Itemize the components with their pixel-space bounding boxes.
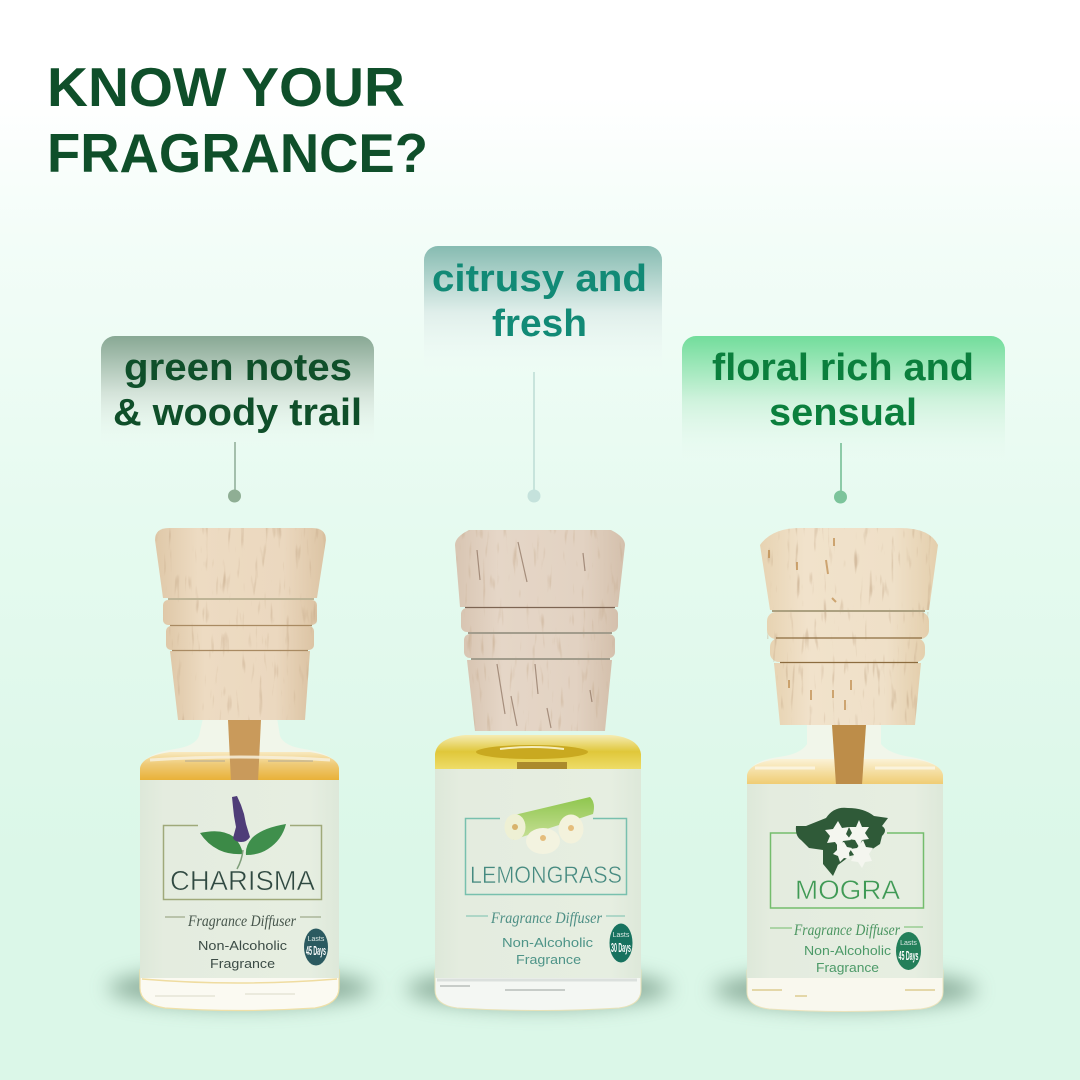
icon: lemongrass stalk <box>504 797 594 854</box>
callout: green notes <box>101 336 374 502</box>
title: KNOW YOUR <box>47 56 405 118</box>
callout: citrusy and fresh: citrusy and <box>432 258 647 300</box>
label <box>140 780 339 978</box>
badge <box>610 924 632 962</box>
badge: Lasts <box>900 940 917 947</box>
badge <box>304 928 328 966</box>
neck and liquid <box>747 724 943 785</box>
product note: Non-Alcoholic <box>804 943 892 958</box>
callout: floral rich and sensual <box>682 336 1005 504</box>
title <box>47 56 428 184</box>
product: Charisma bottle: 45 Days <box>306 943 326 958</box>
product note: Fragrance <box>516 952 581 967</box>
callout: green notes: green notes <box>124 347 352 389</box>
callout: floral rich and sensual: sensual <box>769 392 917 434</box>
callout: green notes: & woody trail <box>113 392 362 434</box>
product note: Fragrance <box>210 956 275 971</box>
label <box>747 784 943 978</box>
product: Charisma bottle <box>140 528 339 1010</box>
callout: floral rich and sensual: floral rich and <box>712 347 974 389</box>
product: Lemongrass bottle: 30 Days <box>611 940 631 955</box>
product: Lemongrass bottle <box>435 530 641 1010</box>
product note <box>804 943 892 975</box>
glass base <box>747 970 943 1012</box>
frame <box>466 818 626 894</box>
badge: Lasts <box>613 932 630 939</box>
product note <box>198 938 288 971</box>
subtitle: Fragrance Diffuser <box>187 913 297 930</box>
ground shadow <box>108 969 977 1009</box>
neck and liquid <box>435 735 641 772</box>
callout: citrusy and fresh <box>424 246 662 502</box>
glass base <box>140 970 339 1010</box>
wooden cap <box>455 530 625 731</box>
frame <box>770 833 924 908</box>
product note <box>502 935 594 967</box>
product note: Non-Alcoholic <box>502 935 594 950</box>
neck and liquid <box>140 718 339 783</box>
glass base <box>435 970 641 1010</box>
wooden cap <box>760 528 938 725</box>
product note: Fragrance <box>816 960 879 975</box>
product note: Non-Alcoholic <box>198 938 288 953</box>
frame <box>164 826 322 900</box>
product: Mogra bottle <box>747 528 943 1012</box>
callout: citrusy and fresh: fresh <box>492 303 587 345</box>
subtitle: Fragrance Diffuser <box>490 910 603 927</box>
name: CHARISMA <box>170 865 315 896</box>
name: LEMONGRASS <box>470 862 622 889</box>
wooden cap <box>155 528 326 720</box>
title: FRAGRANCE? <box>47 122 428 184</box>
icon: leaves and flower <box>200 796 286 869</box>
product: Mogra bottle: 45 Days <box>898 948 918 963</box>
badge <box>896 932 921 970</box>
subtitle: Fragrance Diffuser <box>793 922 901 939</box>
name: MOGRA <box>795 875 900 905</box>
icon: jasmine flowers <box>796 808 888 876</box>
label <box>435 769 641 978</box>
badge: Lasts <box>308 936 325 943</box>
